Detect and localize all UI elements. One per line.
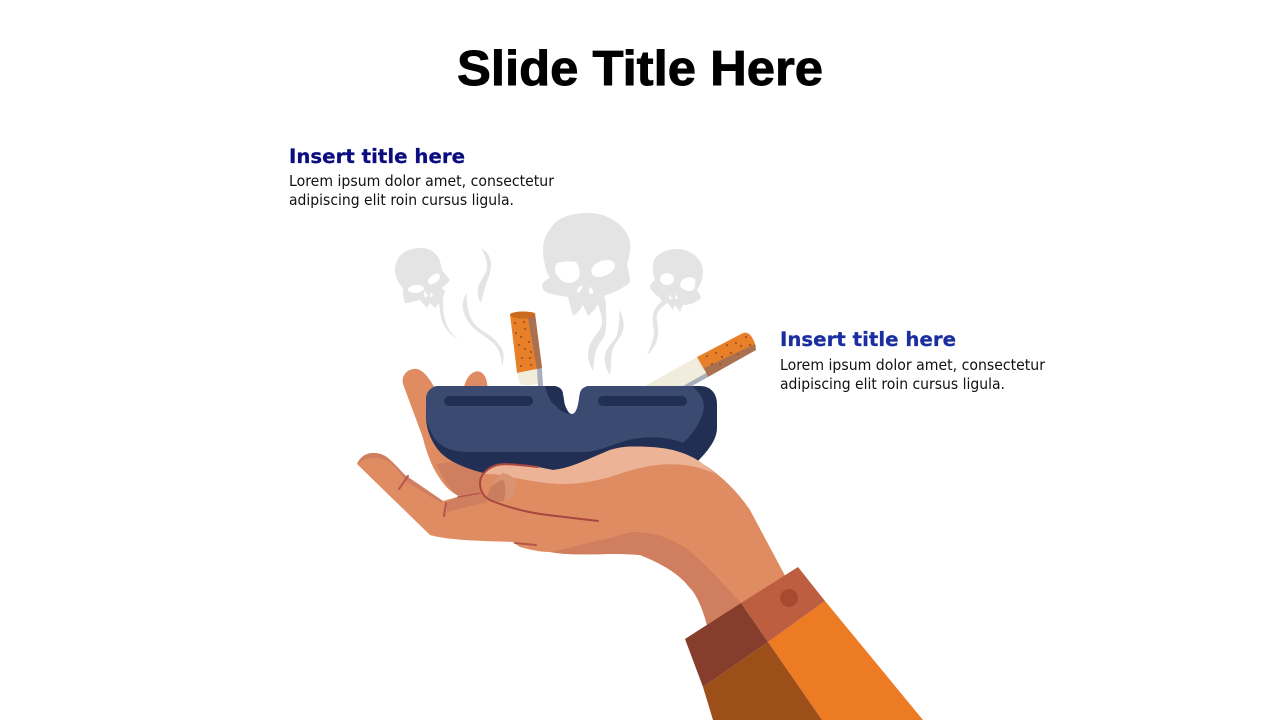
ashtray	[426, 386, 717, 490]
back fingers of hand	[403, 369, 520, 503]
text block: upper left callout: Insert title here	[289, 145, 465, 168]
icon: smoke wisps	[463, 248, 504, 366]
text block: right callout: Lorem ipsum dolor amet, consectetur	[780, 356, 1046, 374]
wrist and palm shadow	[550, 532, 741, 625]
text block: upper left callout	[289, 145, 555, 209]
text block: upper left callout: adipiscing elit roin cursus ligula.	[289, 191, 514, 209]
icon: upright cigarette butt	[510, 312, 543, 386]
ashtray left slot	[444, 396, 533, 406]
cuff dark	[685, 603, 768, 687]
text block: right callout: Insert title here	[780, 328, 956, 351]
cuff button	[780, 589, 798, 607]
sleeve shadow side	[703, 642, 822, 720]
ashtray dark base	[426, 386, 717, 490]
sleeve	[685, 567, 923, 720]
front hand and wrist	[357, 446, 790, 625]
ashtray light front	[426, 386, 704, 452]
icon: tilted cigarette butt	[645, 333, 756, 386]
palm shadow	[436, 462, 482, 496]
icon: large skull with smoke	[542, 213, 630, 375]
title: Slide Title Here	[457, 42, 823, 96]
icon: smoke skulls	[395, 213, 703, 375]
icon: right skull with smoke	[647, 249, 703, 355]
finger shading	[357, 453, 443, 503]
icon: left skull with smoke	[395, 248, 458, 340]
hand crease lines	[399, 464, 598, 545]
thumbnail	[487, 473, 516, 502]
highlight on top of hand	[484, 446, 715, 484]
text block: right callout	[780, 328, 1046, 393]
text block: right callout: adipiscing elit roin cursus ligula.	[780, 375, 1005, 393]
ashtray right slot	[598, 396, 687, 406]
text block: upper left callout: Lorem ipsum dolor amet, consectetur	[289, 172, 555, 190]
cuff light	[741, 567, 825, 642]
sleeve front	[768, 601, 923, 720]
finger joint shading	[447, 492, 487, 512]
hand	[357, 369, 790, 625]
